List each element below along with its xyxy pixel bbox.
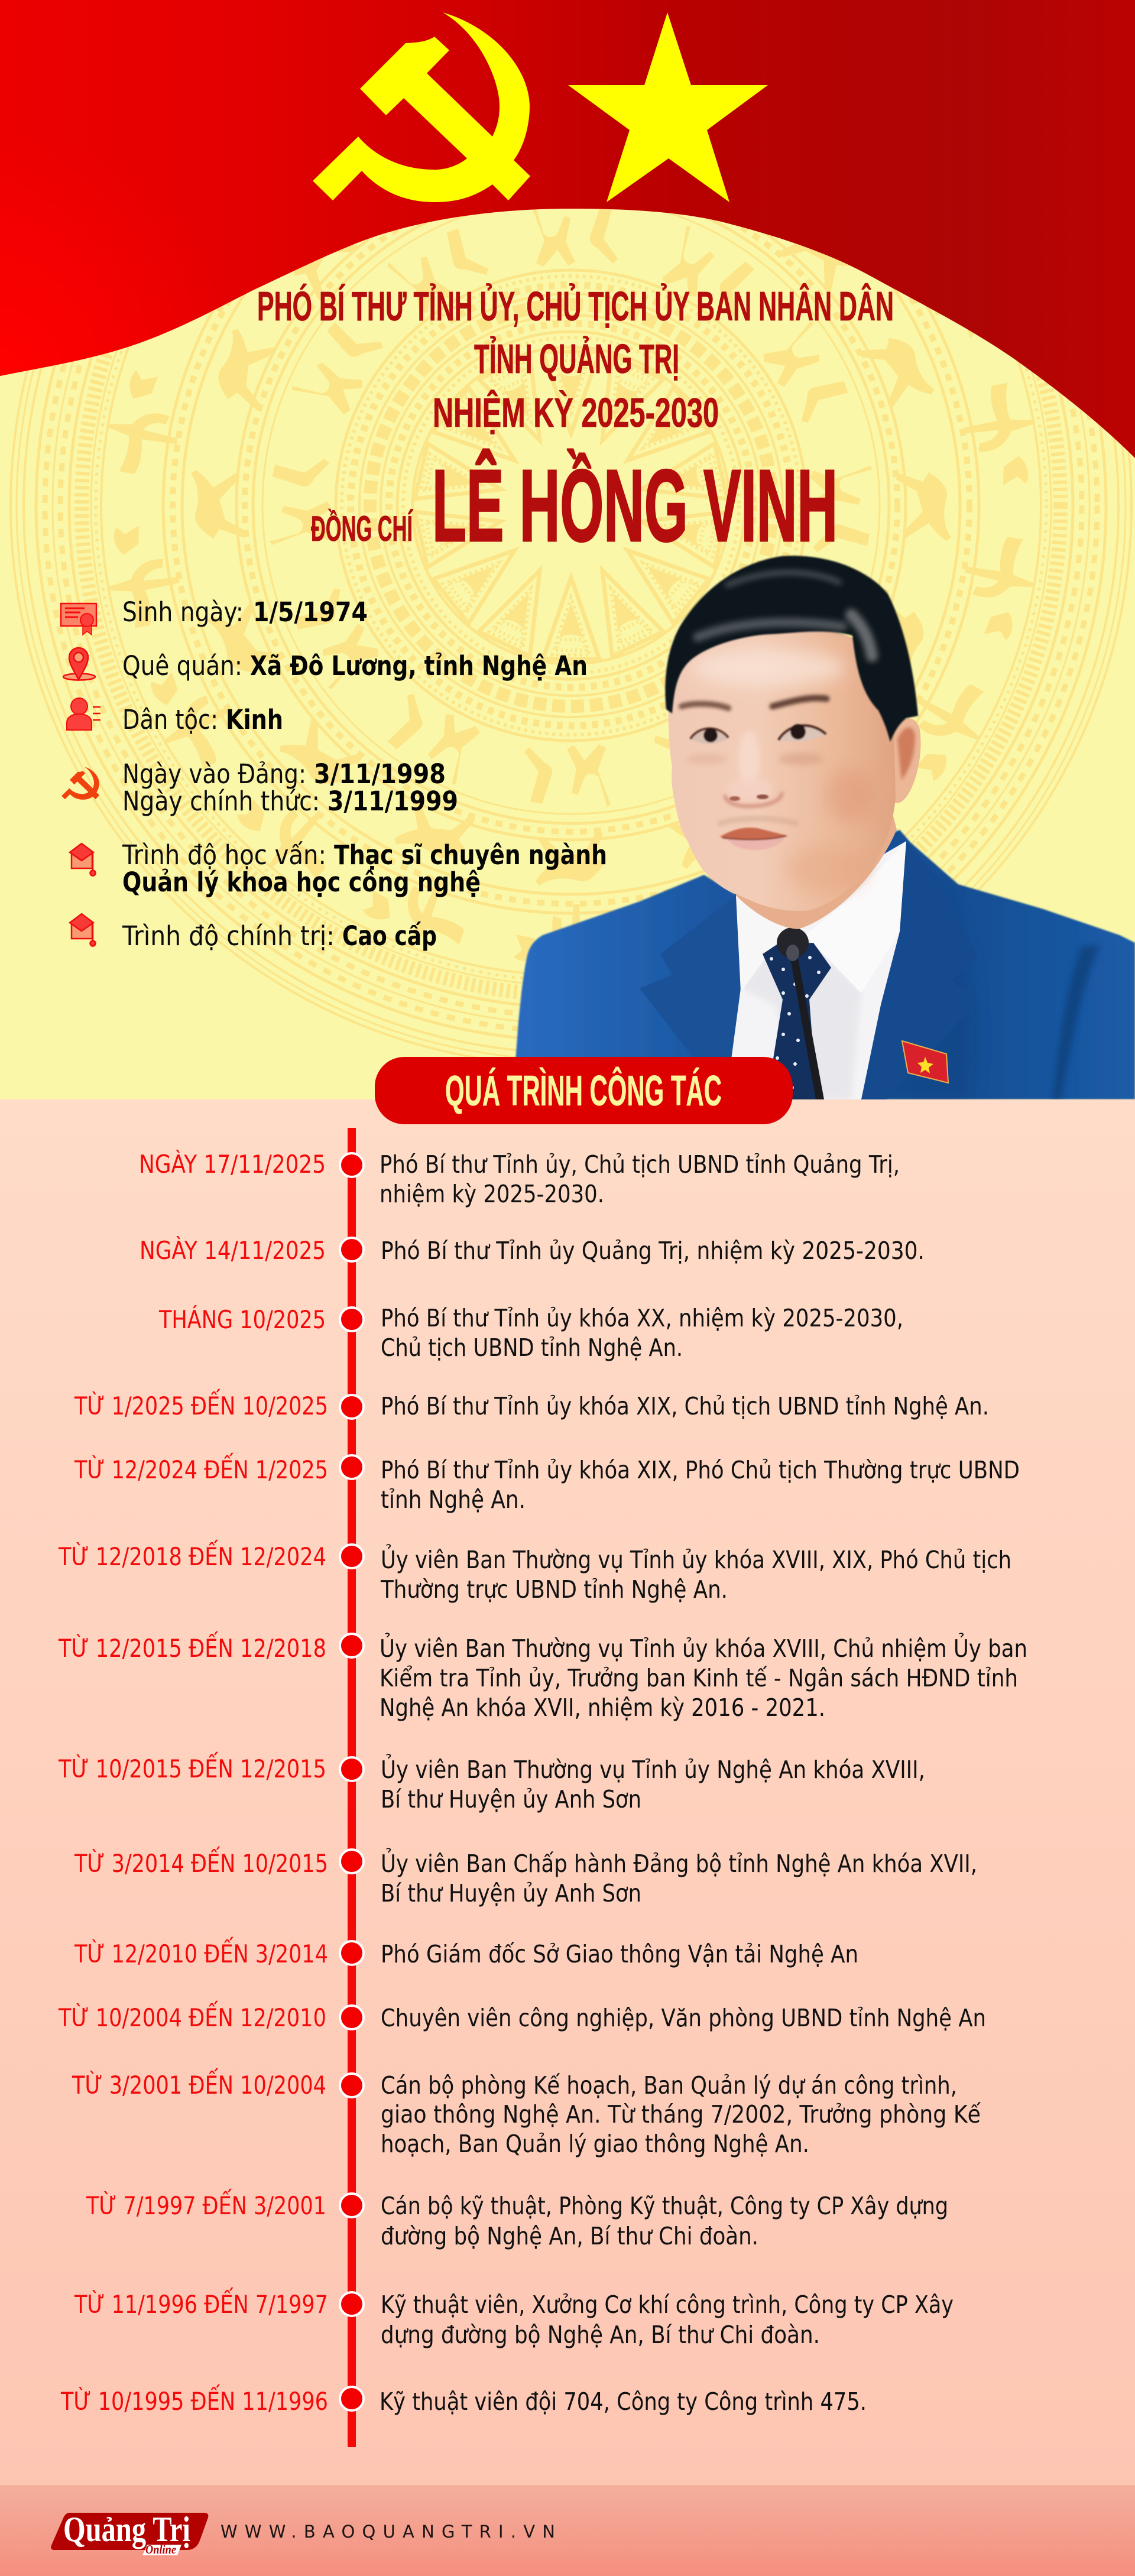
entry 8	[58, 1751, 925, 1813]
logo: Quảng Trị Online: Online	[145, 2542, 176, 2556]
entry 14	[74, 2287, 954, 2349]
entry 12: giao thông Nghệ An. Từ tháng 7/2002, Trưởng phòng Kế	[381, 2100, 981, 2129]
political level row: Cao cấp	[342, 920, 437, 952]
entry 10	[74, 1936, 858, 1968]
shirt	[726, 841, 906, 1099]
party dates rows	[122, 758, 458, 817]
red flag wave banner	[0, 0, 1135, 458]
entry 5: tỉnh Nghệ An.	[381, 1485, 526, 1514]
entry 7: Nghệ An khóa XVII, nhiệm kỳ 2016 - 2021.	[380, 1693, 825, 1722]
icon: graduation cap 1	[70, 843, 96, 876]
entry 4: TỪ 1/2025 ĐẾN 10/2025	[74, 1388, 328, 1420]
entry 15: Kỹ thuật viên đội 704, Công ty Công trình 475.	[380, 2387, 867, 2416]
entry 9	[74, 1846, 977, 1907]
entry 14: Kỹ thuật viên, Xưởng Cơ khí công trình, Công ty CP Xây	[381, 2291, 954, 2319]
education row	[122, 839, 607, 898]
heading pill: QUÁ TRÌNH CÔNG TÁC: QUÁ TRÌNH CÔNG TÁC	[445, 1067, 722, 1115]
entry 3	[158, 1304, 903, 1362]
entry 14: dựng đường bộ Nghệ An, Bí thư Chi đoàn.	[381, 2321, 820, 2349]
face	[668, 624, 896, 911]
entry 1: NGÀY 17/11/2025	[139, 1149, 326, 1179]
name prefix: ĐỒNG CHÍ	[311, 509, 413, 549]
icon: map pin	[63, 648, 95, 680]
jacket shading	[887, 972, 974, 1099]
panel: work history background	[0, 1099, 1135, 2485]
entry 8: Ủy viên Ban Thường vụ Tỉnh ủy Nghệ An khóa XVIII,	[381, 1754, 925, 1784]
entry 12: hoạch, Ban Quản lý giao thông Nghệ An.	[381, 2130, 809, 2158]
entry 3: THÁNG 10/2025	[158, 1305, 326, 1334]
neck	[736, 815, 897, 929]
entry 7	[58, 1631, 1027, 1722]
collar right	[805, 841, 906, 993]
hometown row	[122, 650, 588, 682]
entry 12: Cán bộ phòng Kế hoạch, Ban Quản lý dự án công trình,	[381, 2071, 957, 2100]
title line 2: TỈNH QUẢNG TRỊ	[474, 336, 679, 382]
entry 10: Phó Giám đốc Sở Giao thông Vận tải Nghệ An	[381, 1940, 858, 1968]
entry 2: NGÀY 14/11/2025	[140, 1235, 326, 1265]
entry 9: Bí thư Huyện ủy Anh Sơn	[381, 1879, 641, 1907]
entry 11: TỪ 10/2004 ĐẾN 12/2010	[58, 2000, 326, 2032]
education row: Thạc sĩ chuyên ngành	[334, 839, 607, 871]
entry 9: TỪ 3/2014 ĐẾN 10/2015	[74, 1846, 328, 1878]
collar left	[736, 896, 765, 991]
ear	[894, 719, 921, 803]
entry 11: Chuyên viên công nghiệp, Văn phòng UBND tỉnh Nghệ An	[381, 2004, 986, 2032]
face shading	[686, 649, 873, 893]
logo: Quảng Trị Online: Quảng Trị	[63, 2510, 190, 2549]
entry 6: Thường trực UBND tỉnh Nghệ An.	[380, 1575, 728, 1604]
education row: Trình độ học vấn:	[122, 839, 326, 871]
party dates rows: 3/11/1999	[327, 786, 458, 817]
entry 6: TỪ 12/2018 ĐẾN 12/2024	[58, 1539, 326, 1571]
entry 9: Ủy viên Ban Chấp hành Đảng bộ tỉnh Nghệ An khóa XVII,	[381, 1848, 977, 1878]
entry 4	[74, 1388, 989, 1420]
icon: small hammer and sickle	[61, 767, 99, 800]
birth date row	[122, 596, 368, 628]
entry 7: Ủy viên Ban Thường vụ Tỉnh ủy khóa XVIII, Chủ nhiệm Ủy ban	[380, 1633, 1027, 1663]
mouth	[719, 828, 788, 850]
birth date row: 1/5/1974	[253, 596, 368, 628]
entry 13: TỪ 7/1997 ĐẾN 3/2001	[86, 2188, 326, 2220]
entry 5: Phó Bí thư Tỉnh ủy khóa XIX, Phó Chủ tịch Thường trực UBND	[381, 1456, 1020, 1484]
entry 7: TỪ 12/2015 ĐẾN 12/2018	[58, 1631, 326, 1663]
entry 13: đường bộ Nghệ An, Bí thư Chi đoàn.	[381, 2222, 758, 2250]
entry 5: TỪ 12/2024 ĐẾN 1/2025	[74, 1452, 328, 1484]
party dates rows: Ngày chính thức:	[122, 786, 320, 817]
entry 2: Phó Bí thư Tỉnh ủy Quảng Trị, nhiệm kỳ 2025-2030.	[381, 1237, 925, 1265]
timeline vertical bar	[348, 1128, 356, 2447]
timeline	[58, 1128, 1027, 2447]
entry 5	[74, 1452, 1020, 1514]
hometown row: Quê quán:	[122, 650, 242, 682]
entry 12: TỪ 3/2001 ĐẾN 10/2004	[72, 2068, 326, 2100]
entry 6: Ủy viên Ban Thường vụ Tỉnh ủy khóa XVIII, XIX, Phó Chủ tịch	[381, 1544, 1011, 1574]
entry 1: Phó Bí thư Tỉnh ủy, Chủ tịch UBND tỉnh Quảng Trị,	[380, 1150, 900, 1179]
entry 1: nhiệm kỳ 2025-2030.	[380, 1180, 604, 1208]
entry 15	[60, 2384, 867, 2416]
left lapel	[640, 896, 741, 1057]
portrait of Lê Hồng Vinh	[513, 556, 1135, 1099]
panel: personal information list	[61, 596, 607, 952]
party dates rows: 3/11/1998	[314, 758, 446, 790]
ethnicity row	[122, 704, 283, 735]
ethnicity row: Dân tộc:	[122, 704, 218, 735]
entry 10: TỪ 12/2010 ĐẾN 3/2014	[74, 1936, 328, 1968]
entry 8: TỪ 10/2015 ĐẾN 12/2015	[58, 1751, 326, 1783]
entry 3: Phó Bí thư Tỉnh ủy khóa XX, nhiệm kỳ 2025-2030,	[381, 1304, 903, 1332]
entry 15: TỪ 10/1995 ĐẾN 11/1996	[60, 2384, 328, 2416]
ethnicity row: Kinh	[226, 704, 283, 735]
title block	[257, 283, 894, 563]
title line 3: NHIỆM KỲ 2025-2030	[433, 389, 719, 436]
entry 4: Phó Bí thư Tỉnh ủy khóa XIX, Chủ tịch UBND tỉnh Nghệ An.	[381, 1392, 989, 1420]
entry 14: TỪ 11/1996 ĐẾN 7/1997	[74, 2287, 328, 2319]
hometown row: Xã Đô Lương, tỉnh Nghệ An	[250, 650, 588, 682]
icon: person	[67, 698, 100, 730]
hair highlights	[698, 573, 872, 656]
icon: graduation cap 2	[70, 914, 96, 946]
eyebrows	[682, 698, 826, 708]
entry 13	[86, 2188, 948, 2250]
entry 8: Bí thư Huyện ủy Anh Sơn	[381, 1785, 641, 1813]
panel: yellow header background	[9, 209, 1133, 1057]
lapel pin	[902, 1041, 948, 1083]
entry 7: Kiểm tra Tỉnh ủy, Trưởng ban Kinh tế - Ngân sách HĐND tỉnh	[380, 1664, 1018, 1692]
entry 13: Cán bộ kỹ thuật, Phòng Kỹ thuật, Công ty CP Xây dựng	[381, 2192, 948, 2220]
suit jacket	[513, 830, 1135, 1099]
nose	[725, 777, 782, 806]
website address: WWW.BAOQUANGTRI.VN	[220, 2522, 555, 2542]
microphone	[777, 927, 824, 1099]
political level row: Trình độ chính trị:	[122, 920, 335, 952]
hair	[665, 556, 918, 742]
education row: Quản lý khoa học công nghệ	[122, 867, 481, 898]
necktie with dots	[763, 943, 831, 1099]
heading pill: QUÁ TRÌNH CÔNG TÁC	[375, 1057, 793, 1124]
right lapel	[861, 842, 906, 1099]
icon: hammer and sickle emblem	[313, 12, 530, 202]
party dates rows: Ngày vào Đảng:	[122, 758, 306, 790]
icon: certificate	[61, 604, 96, 635]
icon: yellow five-point star	[568, 12, 768, 202]
entry 6	[58, 1539, 1011, 1604]
entry 11	[58, 2000, 986, 2032]
birth date row: Sinh ngày:	[122, 596, 244, 628]
entry 3: Chủ tịch UBND tỉnh Nghệ An.	[381, 1334, 683, 1362]
entry 2	[140, 1235, 925, 1265]
eyes	[690, 724, 826, 744]
bronze drum watermark pattern	[9, 213, 1133, 1057]
entry 12	[72, 2068, 981, 2158]
entry 1	[139, 1149, 900, 1208]
panel: footer	[0, 2485, 1135, 2576]
